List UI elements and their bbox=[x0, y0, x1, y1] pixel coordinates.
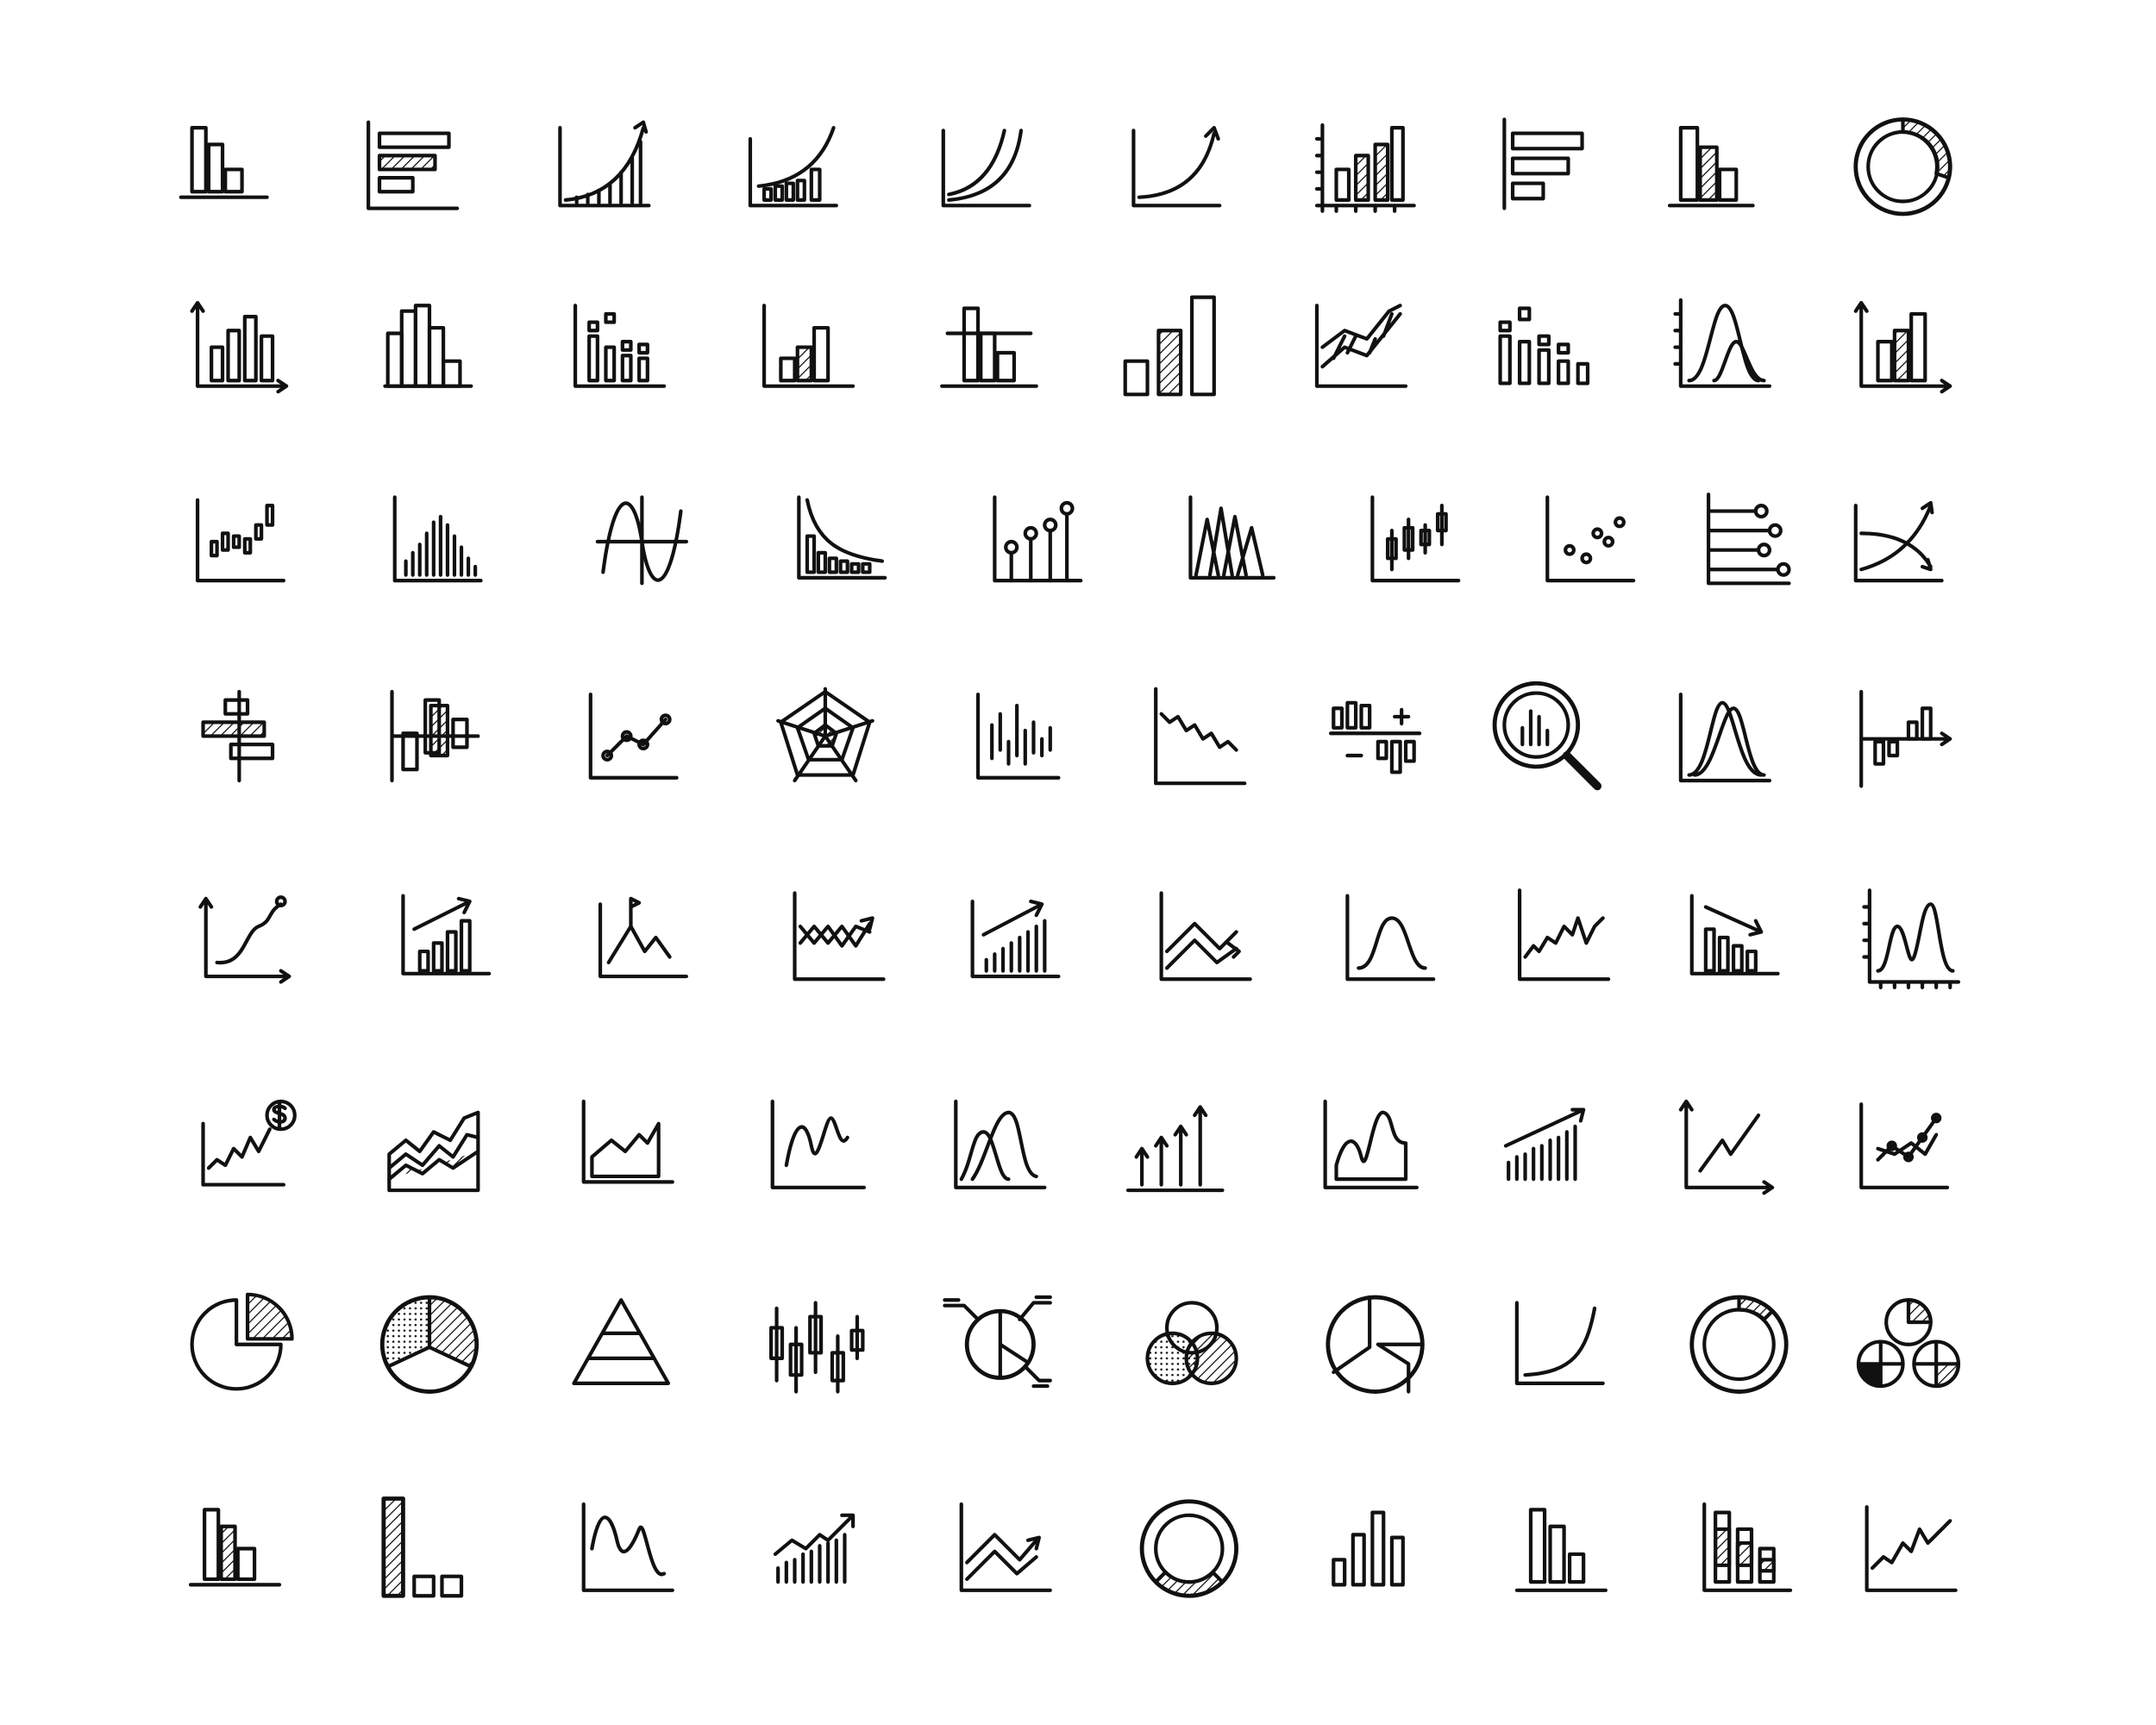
icon: scatter bbox=[1547, 497, 1633, 580]
icon: bars arrow bbox=[775, 1515, 853, 1582]
icon: bars with arrows axis bbox=[192, 303, 286, 392]
icon: horizontal bars bbox=[368, 122, 457, 209]
icon: four bars bbox=[1333, 1513, 1403, 1584]
icon: bars axis ticks bbox=[1317, 125, 1414, 211]
icon: bars baseline bbox=[181, 128, 267, 198]
icon: two curves bbox=[943, 130, 1030, 205]
icon: curve with arrows bbox=[200, 897, 289, 982]
icon: declining line bbox=[1156, 689, 1244, 783]
icon: stacked bars bbox=[1704, 1504, 1790, 1590]
icon: up arrows bbox=[1128, 1107, 1222, 1190]
icon: decaying wave bbox=[584, 1504, 673, 1590]
icon: donut bbox=[1856, 119, 1950, 214]
icon: three bars baseline bbox=[1517, 1509, 1606, 1590]
icon: bell curves bbox=[1675, 300, 1770, 386]
row 6 bbox=[204, 1101, 1947, 1193]
icon: crossing lines arrow bbox=[794, 893, 884, 979]
icon: bell bbox=[1347, 896, 1433, 979]
icon: bars arrow up bbox=[1506, 1110, 1583, 1179]
icon: bars baseline 2 bbox=[191, 1509, 279, 1584]
icon: pos neg bars arrow bbox=[1861, 692, 1950, 786]
icon: noisy line bbox=[1520, 890, 1608, 979]
icon: dotted columns bbox=[1501, 308, 1588, 383]
icon: dot bars bbox=[575, 305, 664, 386]
icon: curve arrow bbox=[1133, 128, 1219, 205]
icon: candlestick small bbox=[197, 500, 284, 580]
icon: crossing lines up bbox=[962, 1504, 1050, 1590]
icon: zigzag arrow bbox=[1162, 893, 1250, 979]
icon: candlesticks bbox=[1372, 497, 1458, 580]
icon: radar bbox=[778, 689, 873, 781]
row 8 bbox=[191, 1499, 1956, 1596]
icon: gantt bbox=[204, 692, 273, 781]
icon: rising bars bbox=[764, 305, 853, 386]
icon: decay bars bbox=[799, 497, 885, 578]
icon: line chart bbox=[1867, 1507, 1956, 1590]
row 3 bbox=[197, 494, 1942, 583]
icon: bars with line bbox=[942, 308, 1037, 386]
icon: curve small bars bbox=[750, 128, 837, 205]
icon: peak flag bbox=[600, 899, 686, 976]
icon: venn bbox=[1148, 1302, 1237, 1383]
icon: bimodal ticks bbox=[1864, 890, 1959, 988]
icon: band chart bbox=[1317, 305, 1406, 386]
icon: magnifier chart bbox=[1495, 683, 1597, 786]
icon: area bimodal bbox=[1326, 1101, 1417, 1188]
icon: double bell bbox=[1681, 694, 1770, 781]
icon: lollipop bbox=[994, 497, 1081, 580]
icon: three rising bars bbox=[1125, 298, 1214, 394]
icon: triangles bbox=[1190, 497, 1274, 578]
icon: overlapping curves bbox=[956, 1101, 1044, 1188]
icon: donut hatched bbox=[1142, 1502, 1237, 1596]
icon: layered area bbox=[389, 1113, 478, 1190]
icon: decreasing bars arrow bbox=[1692, 896, 1778, 974]
icon: donut 2 bbox=[1692, 1297, 1786, 1392]
icon: growth curve bbox=[1517, 1302, 1603, 1383]
icon: positive negative bars bbox=[1331, 703, 1420, 772]
icon: histogram lines bbox=[395, 497, 481, 580]
icon: tall hatched bar bbox=[384, 1499, 461, 1596]
row 1 bbox=[181, 119, 1950, 214]
icon: line with dollar bbox=[204, 1101, 295, 1185]
icon: column bars bbox=[385, 305, 471, 386]
icon: horizontal lollipops bbox=[1708, 494, 1789, 583]
icon: pyramid bbox=[573, 1300, 668, 1383]
icon: pie three parts bbox=[382, 1297, 477, 1392]
icon: candlestick tall bbox=[771, 1302, 862, 1392]
icon: bars decreasing bbox=[1670, 128, 1753, 205]
icon: horizontal bars 2 bbox=[1504, 119, 1583, 209]
icon: bars arrows axis bbox=[1856, 303, 1950, 392]
icon: zigzag axis arrows bbox=[1681, 1101, 1772, 1193]
icon: box plot bbox=[392, 692, 478, 781]
icon: sine axes bbox=[598, 497, 686, 583]
icon: wave curve bbox=[773, 1101, 864, 1188]
row 2 bbox=[192, 298, 1950, 394]
row 5 bbox=[200, 890, 1959, 988]
icon: line dots bbox=[591, 694, 677, 778]
icon: bars trend arrow bbox=[403, 896, 489, 974]
icon: spike lines bbox=[978, 694, 1058, 778]
icon: line markers bbox=[1861, 1104, 1947, 1188]
row 4 bbox=[204, 683, 1950, 786]
row 7 bbox=[192, 1295, 1959, 1392]
icon: pie exploded slice bbox=[1328, 1297, 1422, 1392]
icon: three pies bbox=[1858, 1300, 1959, 1386]
icon: curve with bars bbox=[560, 122, 649, 205]
icon: pie callouts bbox=[944, 1297, 1050, 1386]
icon: area bbox=[584, 1101, 673, 1182]
icon: many bars arrow bbox=[973, 901, 1058, 976]
icon: crossing curves bbox=[1856, 503, 1942, 580]
icon: pie exploded bbox=[192, 1295, 292, 1389]
